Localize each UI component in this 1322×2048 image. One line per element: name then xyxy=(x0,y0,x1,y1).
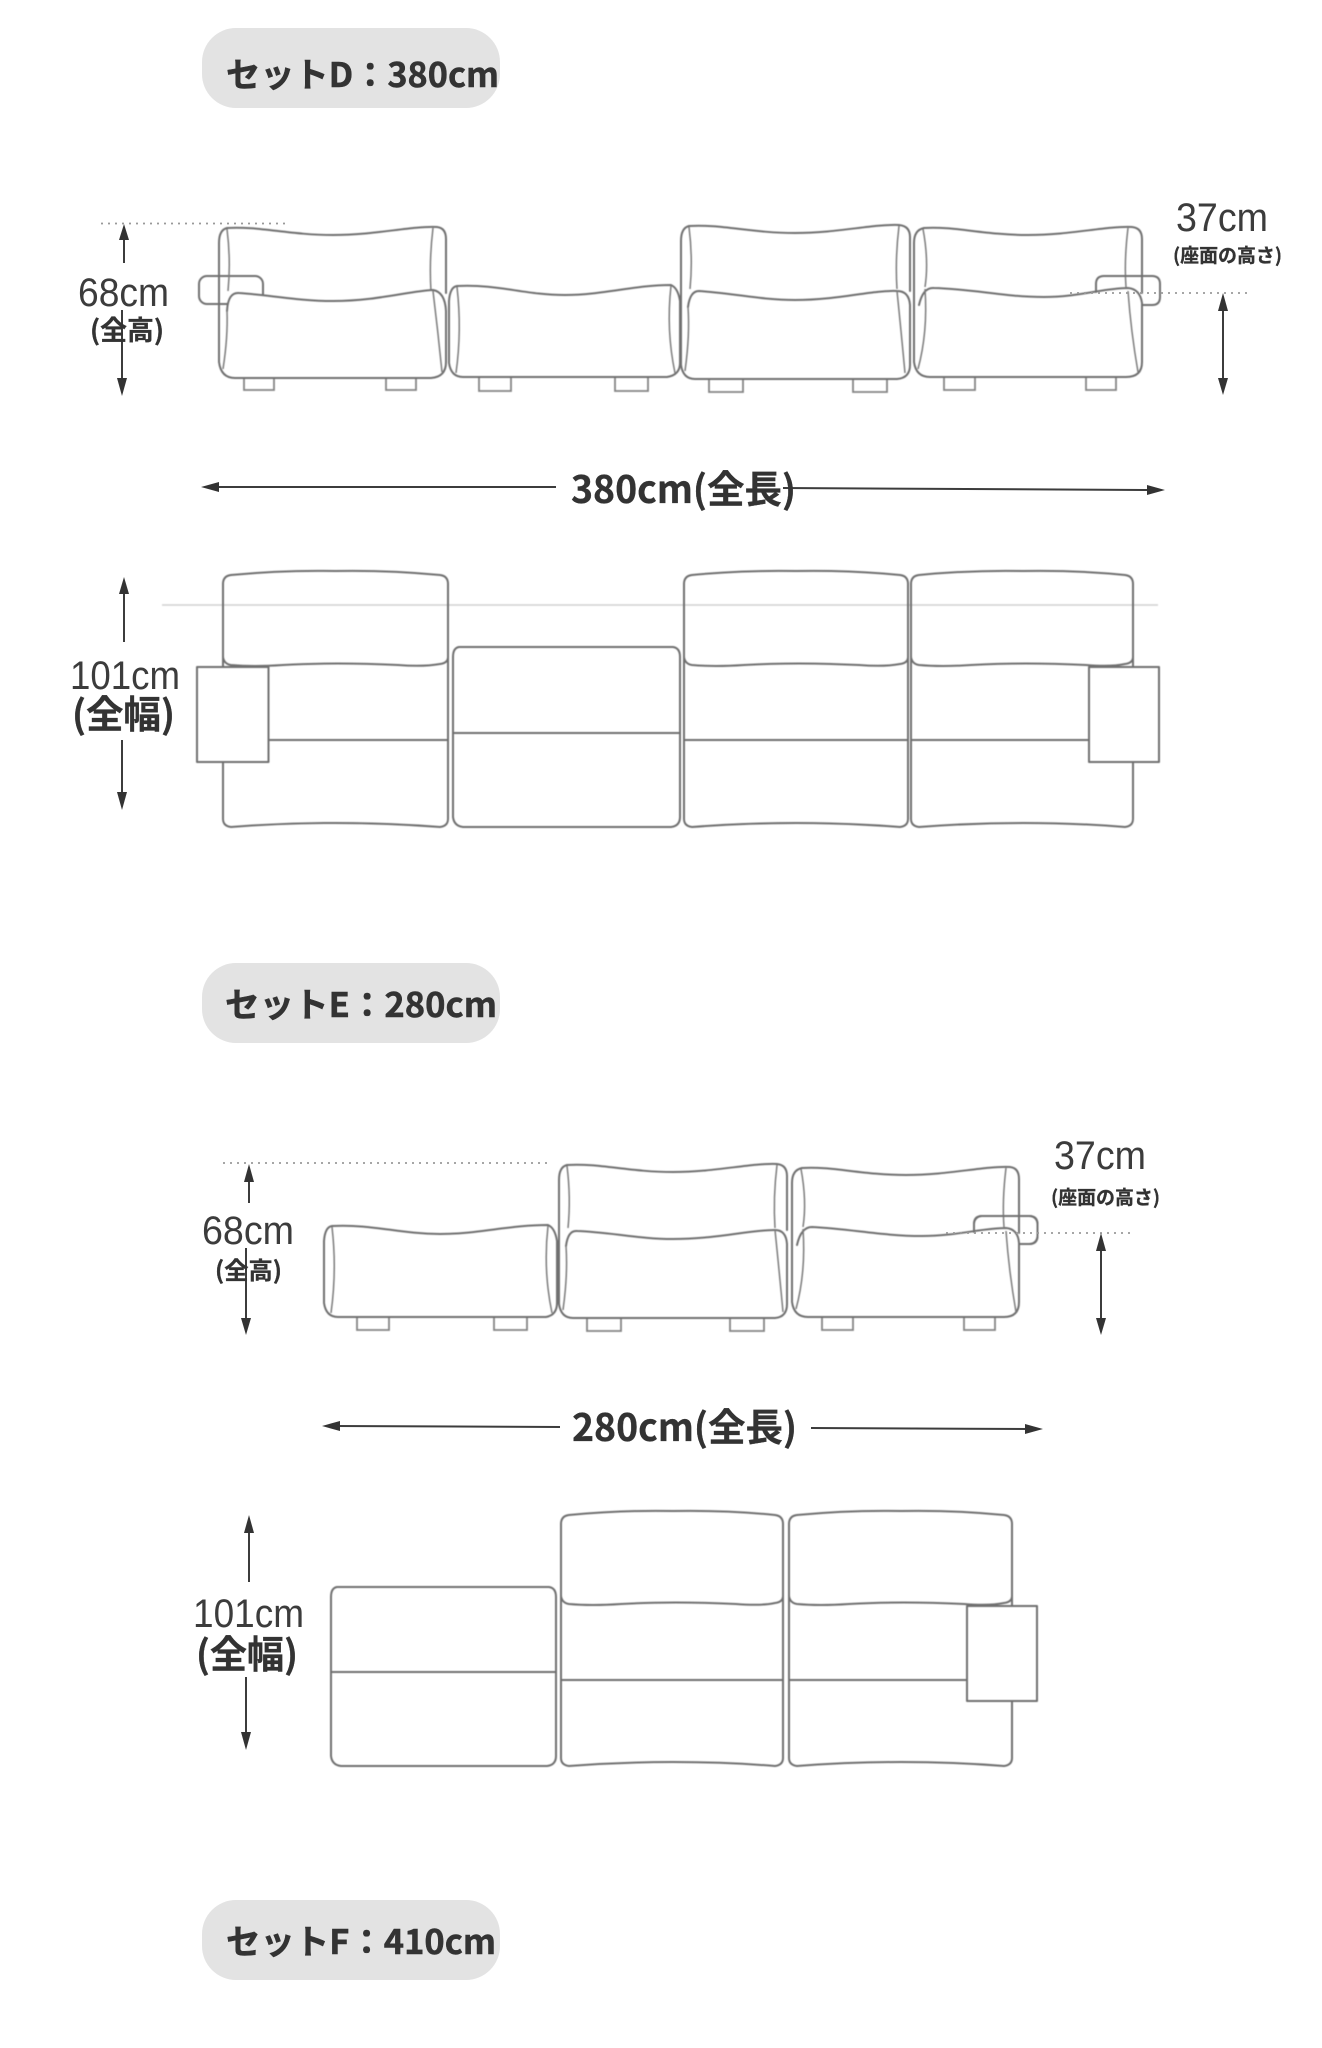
label: set E 37cm seat height: (座面の高さ) xyxy=(1051,1183,1160,1210)
top ottoman module xyxy=(453,647,680,827)
label: set E 101cm width xyxy=(193,1592,304,1679)
arrow: set D seat height xyxy=(1218,293,1228,395)
top dotted guide: set E xyxy=(223,1162,550,1164)
ottoman module xyxy=(449,285,680,391)
label: set E 68cm height: (全高) xyxy=(215,1251,282,1286)
sofa module 4 with back cushion xyxy=(914,227,1142,390)
horizontal reference line xyxy=(162,604,1158,606)
label: set D 68cm height: 68cm xyxy=(78,271,169,315)
arrow: set E overall height xyxy=(241,1164,254,1335)
arrow: set D overall length xyxy=(201,482,1165,495)
heading pill: set E: セットE：280cm xyxy=(225,978,497,1027)
label: set E 37cm seat height: 37cm xyxy=(1054,1134,1146,1178)
seat dotted guide: set E xyxy=(946,1232,1130,1234)
sofa module 3 with back cushion xyxy=(681,225,910,392)
top right module xyxy=(789,1511,1012,1766)
right side table box xyxy=(967,1606,1037,1701)
label: set E 101cm width: 101cm xyxy=(193,1592,304,1636)
seat dotted guide: set D xyxy=(1070,292,1251,294)
label: set E 101cm width: (全幅) xyxy=(196,1624,298,1679)
ottoman module xyxy=(324,1225,557,1330)
right armrest xyxy=(1096,276,1160,305)
arrow: set D overall width xyxy=(117,577,129,810)
arrow: set E overall length xyxy=(322,1421,1043,1434)
top ottoman module xyxy=(331,1587,556,1766)
label: set E 68cm height: 68cm xyxy=(202,1209,294,1253)
side view: set D sofa xyxy=(199,225,1160,392)
top view: set E sofa xyxy=(331,1511,1037,1766)
middle module with back cushion xyxy=(559,1164,787,1331)
label: set D 380cm length: 380cm(全長) xyxy=(571,459,796,514)
arrow: set E overall width xyxy=(241,1515,254,1750)
top dotted guide: set D xyxy=(101,222,285,224)
top module 1 xyxy=(223,571,448,827)
label: set D 37cm seat height: 37cm xyxy=(1176,196,1268,240)
armrest overlay xyxy=(974,1216,1038,1244)
label: set E 37cm seat height xyxy=(1051,1134,1160,1210)
right armrest back part xyxy=(974,1216,1038,1244)
side view: set E sofa xyxy=(324,1164,1038,1331)
top module 3 xyxy=(684,571,908,827)
sofa module 1 with back cushion xyxy=(219,227,446,390)
heading pill: set E xyxy=(202,963,500,1043)
right module with back cushion xyxy=(792,1167,1019,1330)
label: set D 101cm width: (全幅) xyxy=(72,684,175,739)
label: set E 280cm length: 280cm(全長) xyxy=(572,1397,797,1452)
left side table box xyxy=(197,667,268,762)
arrow: set E seat height xyxy=(1096,1233,1106,1335)
heading pill: set D xyxy=(202,28,500,108)
heading pill: set F: セットF：410cm xyxy=(226,1915,496,1964)
label: set D 101cm width: 101cm xyxy=(70,654,180,698)
top middle module xyxy=(561,1511,783,1766)
arrow: set D overall height xyxy=(117,224,129,396)
label: set D 37cm seat height xyxy=(1173,196,1282,268)
left armrest xyxy=(199,276,263,304)
heading pill: set F xyxy=(202,1900,500,1980)
label: set D 101cm width xyxy=(70,654,180,739)
label: set E 68cm height xyxy=(202,1209,294,1286)
heading pill: set D: セットD：380cm xyxy=(226,48,499,97)
top module 4 xyxy=(911,571,1133,827)
label: set D 68cm height xyxy=(78,271,169,348)
label: set D 37cm seat height: (座面の高さ) xyxy=(1173,241,1282,268)
label: set D 68cm height: (全高) xyxy=(90,309,164,348)
right side table box xyxy=(1089,667,1159,762)
top view: set D sofa xyxy=(162,571,1159,827)
